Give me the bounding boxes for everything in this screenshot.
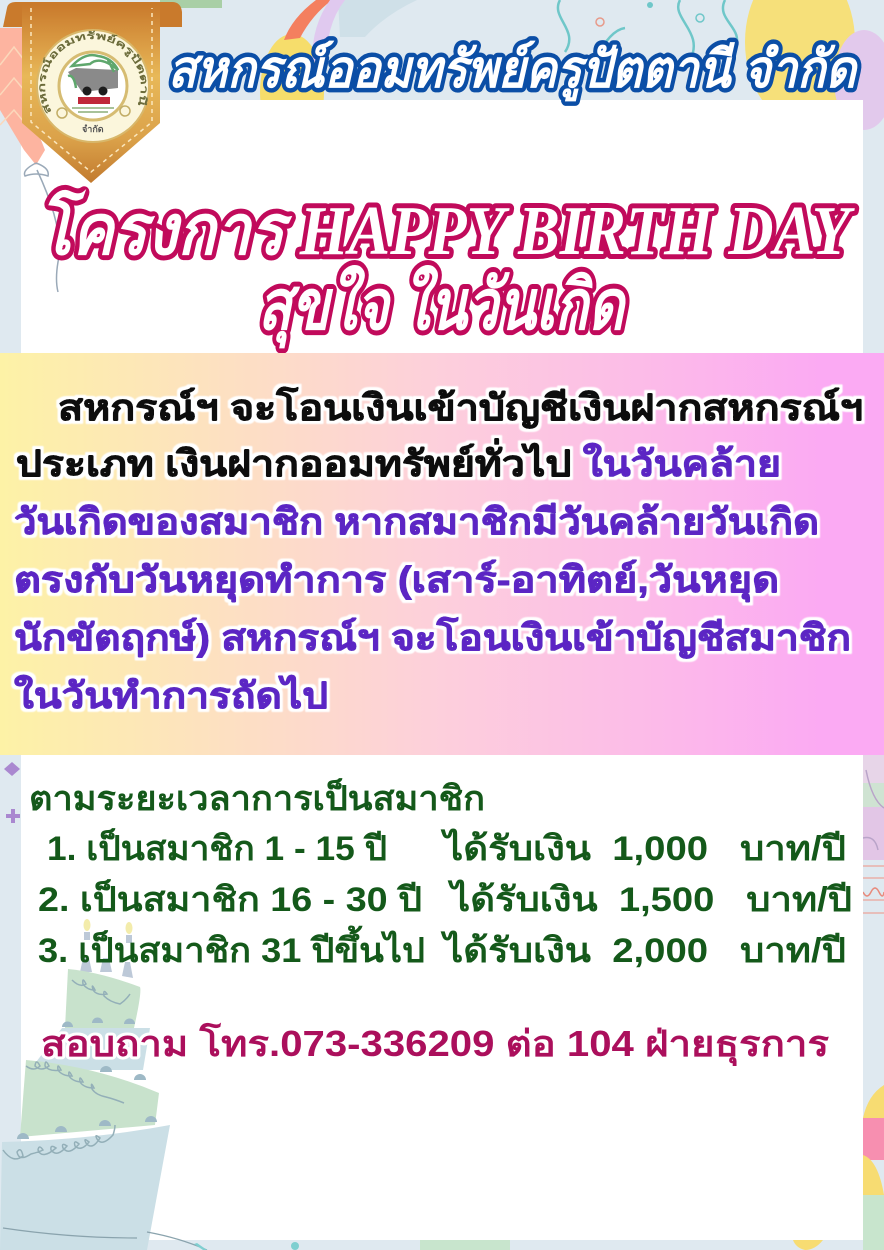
announcement text: นักขัตฤกษ์) สหกรณ์ฯ จะโอนเงินเข้าบัญชีสมาชิก [14, 616, 851, 659]
announcement text: สหกรณ์ฯ จะโอนเงินเข้าบัญชีเงินฝากสหกรณ์ฯ [58, 386, 863, 429]
contact line: สอบถาม โทร.073-336209 ต่อ 104 ฝ่ายธุรการ [41, 1022, 830, 1067]
illustration: birthday cake [0, 919, 207, 1250]
title [38, 189, 856, 349]
balloon [0, 28, 59, 292]
membership benefits list: ได้รับเงิน 1,500 บาท/ปี [448, 879, 852, 919]
membership benefits list: ได้รับเงิน 2,000 บาท/ปี [441, 930, 846, 970]
membership benefits list [29, 777, 852, 970]
membership benefits list: 3. เป็นสมาชิก 31 ปีขึ้นไป [38, 925, 425, 970]
title: สุขใจ ในวันเกิด [258, 265, 627, 349]
membership benefits list: ตามระยะเวลาการเป็นสมาชิก [29, 777, 485, 818]
cooperative seal logo: สหกรณ์ออมทรัพย์ครูปัตตานี [39, 30, 148, 114]
announcement text: ในวันทำการถัดไป [14, 674, 328, 716]
logo ribbon banner [3, 2, 182, 183]
membership benefits list: 2. เป็นสมาชิก 16 - 30 ปี [38, 878, 422, 919]
membership benefits list: ได้รับเงิน 1,000 บาท/ปี [441, 828, 846, 868]
cooperative seal logo: จำกัด [82, 124, 104, 134]
announcement text [14, 386, 863, 716]
membership benefits list: 1. เป็นสมาชิก 1 - 15 ปี [47, 827, 387, 868]
gradient announcement band [0, 353, 884, 755]
announcement text: ตรงกับวันหยุดทำการ (เสาร์-อาทิตย์,วันหยุด [14, 559, 779, 603]
announcement text: ประเภท เงินฝากออมทรัพย์ทั่วไป ในวันคล้าย [16, 438, 781, 484]
announcement text: วันเกิดของสมาชิก หากสมาชิกมีวันคล้ายวันเกิด [14, 501, 819, 542]
